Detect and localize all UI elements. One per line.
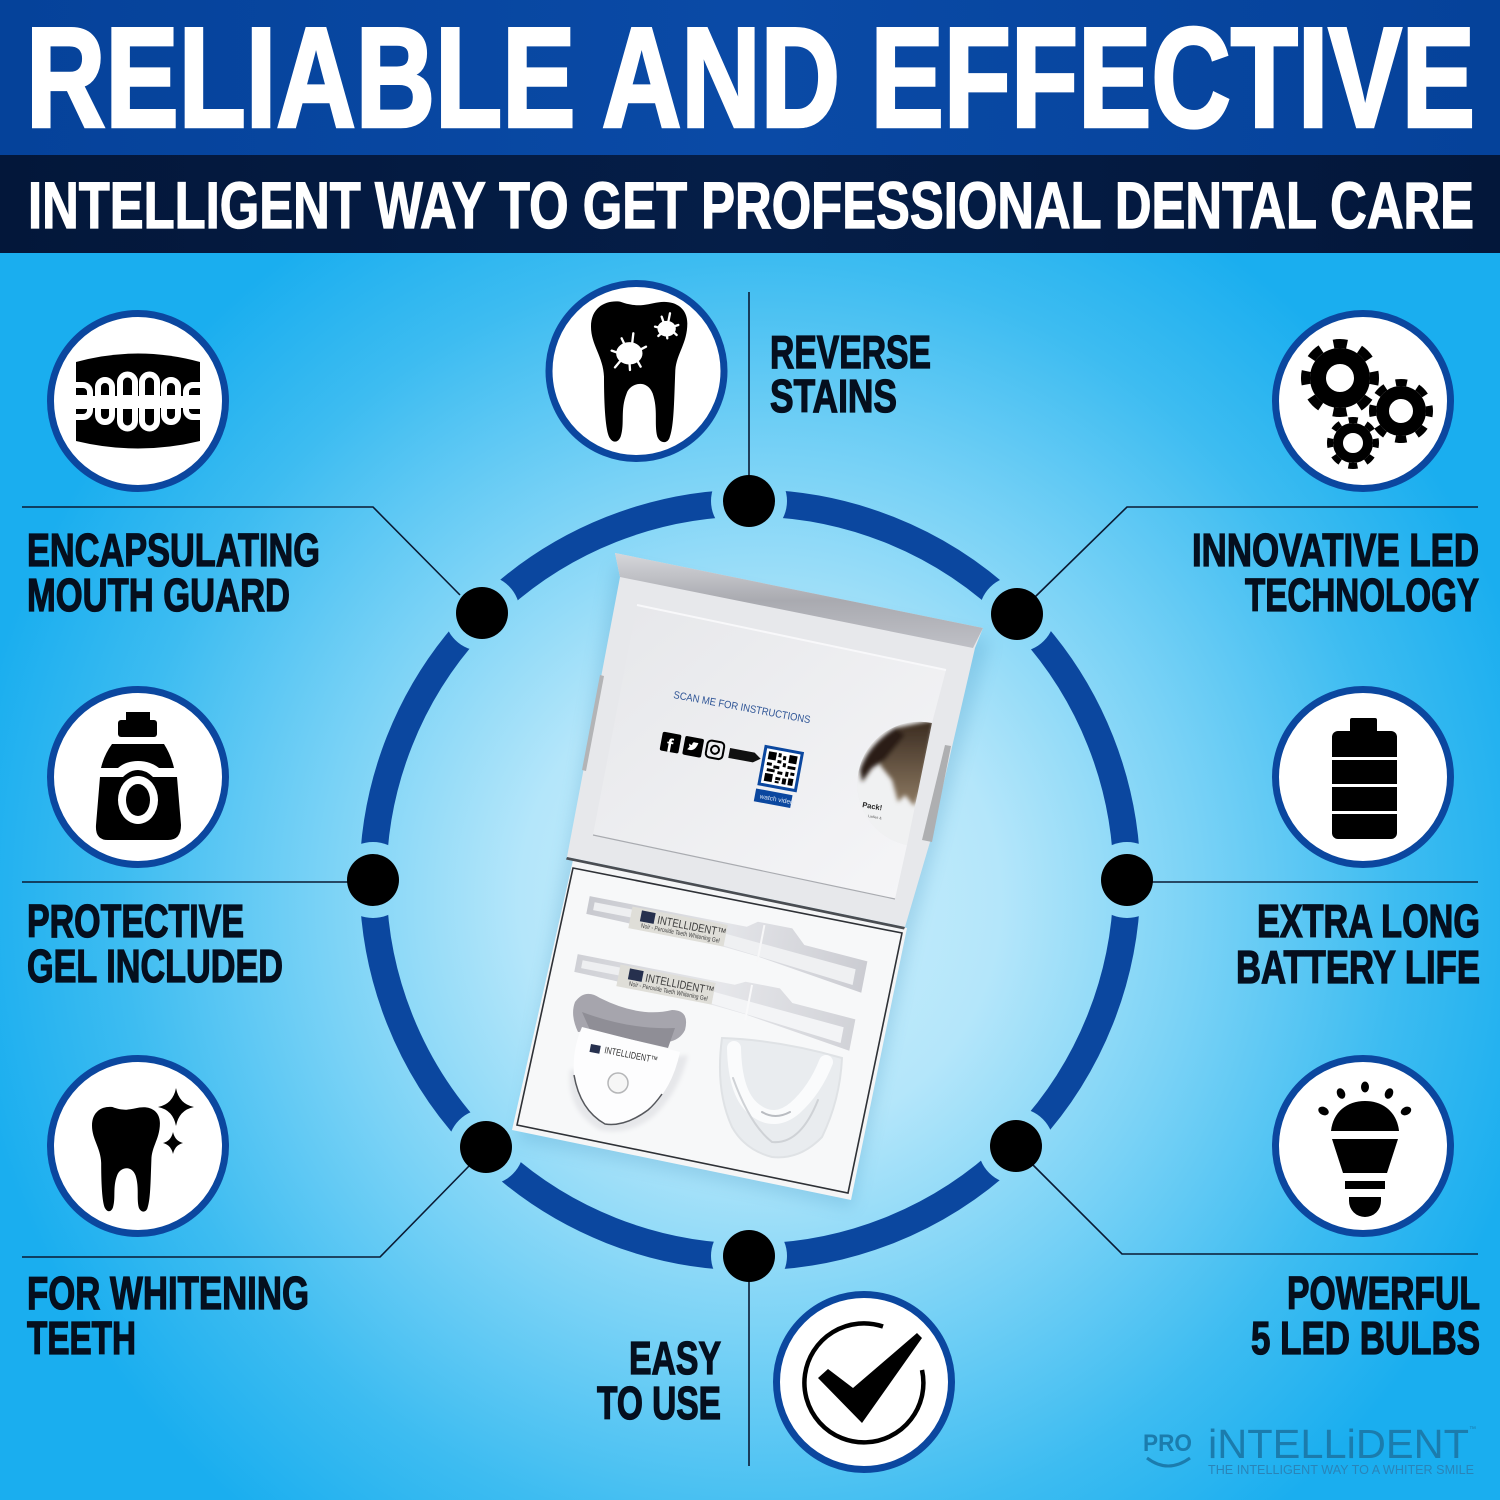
label: reverse stains: REVERSE xyxy=(770,326,931,378)
brand logo: PRO xyxy=(1143,1430,1192,1457)
icon: gears xyxy=(1276,314,1450,488)
icon: LED bulb xyxy=(1276,1058,1450,1234)
label: innovative led technology xyxy=(1192,524,1479,621)
scan me text: SCAN ME FOR INSTRUCTIONS xyxy=(672,689,811,726)
label: encapsulating mouth guard: ENCAPSULATING xyxy=(27,524,320,576)
icon: sparkling tooth xyxy=(50,1058,226,1234)
label: easy to use xyxy=(597,1332,721,1429)
label: powerful 5 led bulbs xyxy=(1251,1267,1480,1364)
label: protective gel included: GEL INCLUDED xyxy=(27,940,283,992)
brand logo: iNTELLiDENT xyxy=(1208,1421,1469,1467)
syringe 2: INTELLIDENT™ xyxy=(644,973,715,998)
syringe 2: Noir - Peroxide Teeth Whitening Gel xyxy=(628,981,709,1003)
syringe 2 xyxy=(570,949,858,1051)
subtitle band xyxy=(0,155,1500,253)
syringe 1: Noir - Peroxide Teeth Whitening Gel xyxy=(640,923,721,945)
label: protective gel included xyxy=(27,895,283,992)
icon: gel bottle xyxy=(50,690,226,864)
hair photo cutout: Pack! xyxy=(862,800,883,812)
label: encapsulating mouth guard: MOUTH GUARD xyxy=(27,569,290,621)
icon: battery xyxy=(1276,690,1450,864)
icon: stained tooth xyxy=(549,284,724,458)
social icons and QR code: f xyxy=(664,736,675,757)
label: easy to use: TO USE xyxy=(597,1377,721,1429)
box base tray xyxy=(512,860,907,1200)
label: for whitening teeth: FOR WHITENING xyxy=(27,1267,309,1319)
brand logo: ™ xyxy=(1469,1426,1476,1433)
LED light device: INTELLIDENT™ xyxy=(603,1045,659,1066)
label: reverse stains: STAINS xyxy=(770,370,897,422)
brand logo: THE INTELLIGENT WAY TO A WHITER SMILE xyxy=(1208,1462,1474,1477)
social icons and QR code xyxy=(653,728,803,808)
hair photo cutout xyxy=(858,722,932,844)
syringe 1 xyxy=(582,889,871,993)
box lid xyxy=(566,553,983,930)
icon: mouth guard teeth xyxy=(50,314,226,488)
hair photo cutout: Ladies & xyxy=(868,814,883,820)
label: for whitening teeth: TEETH xyxy=(27,1312,136,1364)
product: open whitening kit box xyxy=(512,553,990,1208)
header band: title xyxy=(0,0,1500,158)
label: easy to use: EASY xyxy=(629,1332,721,1384)
instruction card xyxy=(593,605,946,899)
icon: check mark xyxy=(776,1294,952,1470)
central ring xyxy=(373,503,1127,1257)
label: reverse stains xyxy=(770,326,931,422)
LED light device xyxy=(570,994,688,1131)
syringe 1: INTELLIDENT™ xyxy=(656,915,727,940)
brand logo xyxy=(1143,1421,1476,1477)
ring node dots xyxy=(347,475,1153,1282)
label: extra long battery life xyxy=(1236,895,1480,993)
label: for whitening teeth xyxy=(27,1267,309,1364)
label: protective gel included: PROTECTIVE xyxy=(27,895,244,947)
label: encapsulating mouth guard xyxy=(27,524,320,621)
connector lines xyxy=(22,292,1478,1466)
social icons and QR code: watch video xyxy=(758,793,794,807)
clear mouth tray xyxy=(720,1038,842,1157)
